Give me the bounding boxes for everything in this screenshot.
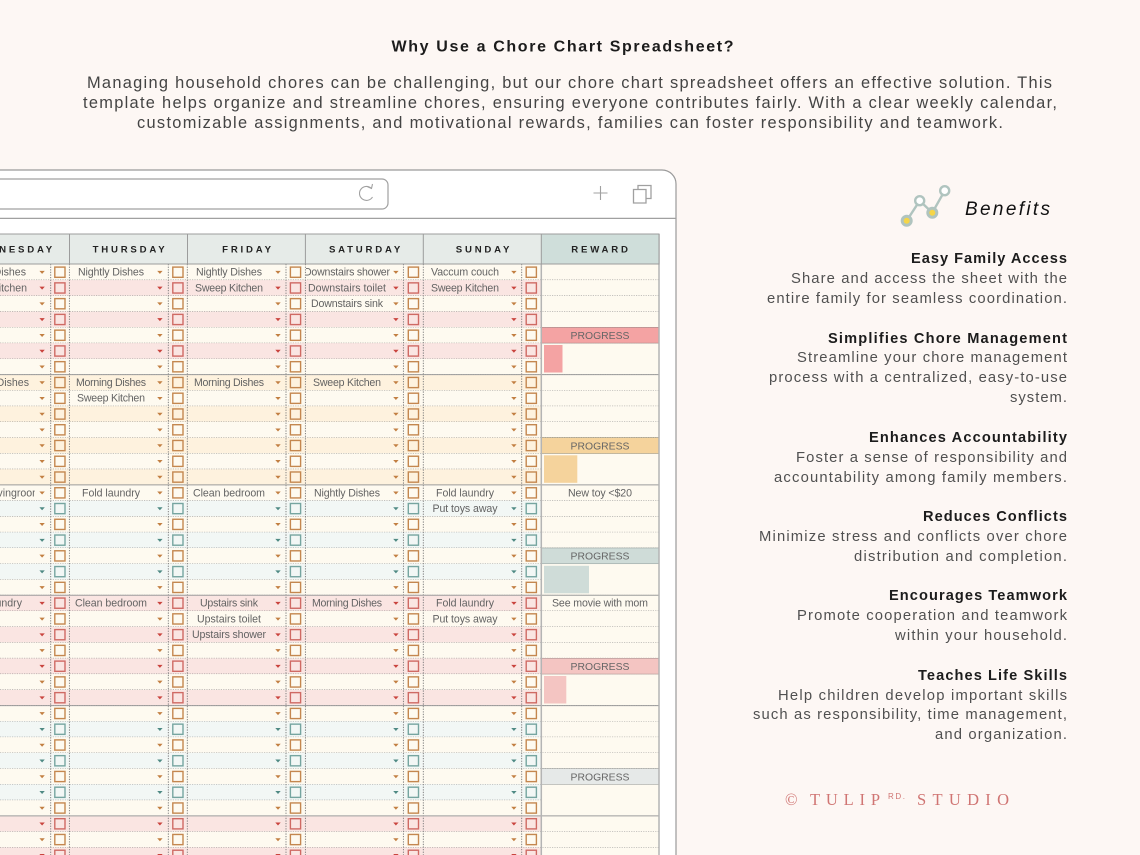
table header row: SATURDAY (329, 244, 403, 255)
friday chores: Upstairs sink (200, 598, 259, 610)
reward entries: New toy <$20 (568, 487, 632, 499)
table header row: SUNDAY (456, 244, 512, 255)
progress red (541, 327, 659, 374)
benefit: enhances accountability (774, 430, 1068, 486)
panel: chore table rows (0, 264, 659, 855)
progress orange: PROGRESS (571, 441, 630, 452)
progress pink: PROGRESS (571, 662, 630, 673)
benefit: teaches life skills: such as responsibility, time management, (753, 707, 1067, 723)
friday chores: Clean bedroom (193, 487, 265, 499)
thursday chores: Clean bedroom (75, 598, 147, 610)
benefit: simplifies chore management (769, 331, 1067, 406)
progress red: PROGRESS (571, 331, 630, 342)
saturday chores: Sweep Kitchen (313, 377, 381, 389)
thursday chores: Sweep Kitchen (77, 393, 145, 405)
panel: reward progress blocks (541, 327, 659, 816)
benefit: easy family access: entire family for seamless coordination. (767, 291, 1067, 307)
heading: benefits: Benefits (965, 199, 1050, 220)
benefit: easy family access: Easy Family Access (911, 251, 1067, 267)
sunday chores (431, 267, 499, 625)
table header row: FRIDAY (222, 244, 274, 255)
saturday chores: Downstairs sink (311, 298, 384, 310)
reward entries (552, 487, 648, 610)
saturday chores: Nightly Dishes (314, 487, 380, 499)
friday chores (192, 267, 266, 641)
progress orange (541, 438, 659, 484)
icon: new tab plus (594, 186, 608, 200)
sunday chores: Sweep Kitchen (431, 282, 499, 294)
icon: benefits line chart (902, 186, 949, 225)
logo: tulip rd. studio: © (785, 790, 798, 809)
sunday chores: Put toys away (432, 503, 498, 515)
benefit: simplifies chore management: process with a centralized, easy-to-use (769, 370, 1067, 386)
thursday chores: Morning Dishes (76, 377, 146, 389)
reward entries: See movie with mom (552, 598, 648, 610)
benefit: enhances accountability: Foster a sense of responsibility and (796, 450, 1067, 466)
friday chores: Nightly Dishes (196, 267, 262, 279)
benefit: reduces conflicts: Minimize stress and conflicts over chore (759, 529, 1067, 545)
friday chores: Upstairs shower (192, 629, 266, 641)
logo: tulip rd. studio: STUDIO (917, 790, 1009, 809)
benefit: teaches life skills (753, 668, 1067, 743)
benefit: teaches life skills: Help children develop important skills (778, 688, 1067, 704)
sunday chores: Vaccum couch (431, 267, 499, 279)
table header row: THURSDAY (93, 244, 167, 255)
saturday chores (304, 267, 390, 610)
sunday chores: Fold laundry (436, 598, 495, 610)
saturday chores: Downstairs toilet (308, 282, 386, 294)
table header row: REWARD (571, 244, 631, 255)
progress teal (541, 548, 659, 595)
sunday chores: Put toys away (432, 613, 498, 625)
logo: tulip rd. studio (785, 790, 1009, 809)
benefit: teaches life skills: Teaches Life Skills (918, 668, 1067, 684)
progress grey: PROGRESS (571, 772, 630, 783)
benefit: easy family access (767, 251, 1067, 307)
benefit: reduces conflicts: Reduces Conflicts (923, 509, 1067, 525)
sunday chores: Fold laundry (436, 487, 495, 499)
intro paragraph: customizable assignments, and motivational rewards, families can foster responsibility and teamwork. (137, 114, 1003, 132)
thursday chores: Nightly Dishes (78, 267, 144, 279)
benefit: simplifies chore management: Streamline your chore management (797, 350, 1067, 366)
saturday chores: Downstairs shower (304, 267, 390, 279)
panel: browser window (0, 170, 676, 855)
intro paragraph: template helps organize and streamline chores, ensuring everyone contributes fairly. With a clear weekly calendar, (83, 94, 1057, 112)
benefit: encourages teamwork: Promote cooperation and teamwork (797, 608, 1068, 624)
icon: copy tabs (634, 186, 651, 203)
thursday chores: Fold laundry (82, 487, 141, 499)
thursday chores (75, 267, 147, 610)
benefit: enhances accountability: Enhances Accountability (869, 430, 1068, 446)
saturday chores: Morning Dishes (312, 598, 382, 610)
grid lines (0, 234, 659, 855)
benefit: easy family access: Share and access the sheet with the (791, 271, 1067, 287)
benefit: enhances accountability: accountability among family members. (774, 470, 1067, 486)
benefit: reduces conflicts: distribution and completion. (854, 549, 1067, 565)
address bar (0, 179, 388, 209)
table header row (0, 234, 659, 264)
benefit: simplifies chore management: Simplifies Chore Management (828, 331, 1067, 347)
benefit: simplifies chore management: system. (1010, 390, 1067, 406)
progress grey (541, 769, 659, 816)
benefit: encourages teamwork: Encourages Teamwork (889, 588, 1068, 604)
benefit: encourages teamwork: within your household. (894, 628, 1067, 644)
intro paragraph: Managing household chores can be challenging, but our chore chart spreadsheet offers an effective solution. This (87, 74, 1052, 92)
wednesday chores (0, 268, 35, 609)
icon: reload (359, 184, 372, 200)
friday chores: Upstairs toilet (197, 613, 261, 625)
benefit: reduces conflicts (759, 509, 1067, 565)
friday chores: Morning Dishes (194, 377, 264, 389)
benefit: encourages teamwork (797, 588, 1068, 644)
intro paragraph (83, 74, 1057, 132)
progress pink (541, 658, 659, 705)
logo: tulip rd. studio: TULIP (810, 790, 880, 809)
benefit: teaches life skills: and organization. (935, 727, 1067, 743)
progress teal: PROGRESS (571, 552, 630, 563)
friday chores: Sweep Kitchen (195, 282, 263, 294)
title: Why Use a Chore Chart Spreadsheet? (392, 38, 734, 56)
logo: tulip rd. studio: RD. (888, 792, 905, 801)
